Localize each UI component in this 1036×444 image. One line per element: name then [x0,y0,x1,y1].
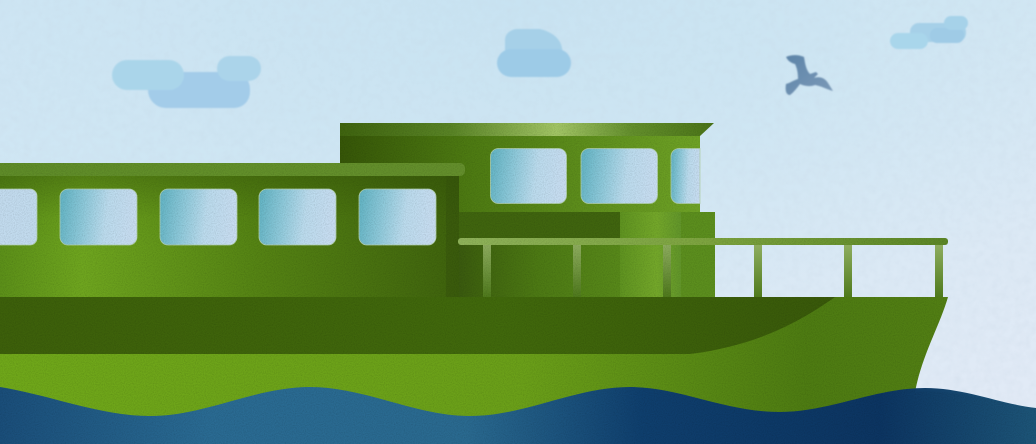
lower cabin aft edge [446,176,459,298]
hull dark band [0,297,835,354]
lower cabin shading [0,176,459,246]
icon: bird [786,55,833,95]
deck block: light section [620,212,681,298]
railing top bar [458,238,948,245]
lower cabin wall [0,170,459,298]
cloud: right [890,16,968,49]
cloud: left [112,56,261,108]
water [0,387,1036,444]
upper cabin windows [490,148,700,204]
upper cabin roof [340,123,714,136]
deck block: fore section [681,212,715,298]
deck block: lower aft [458,212,620,298]
hull [0,297,948,420]
deck block: upper shadow band [458,212,620,238]
railing posts [483,244,943,297]
cloud: centre [497,29,571,77]
texture: grain over boat and water [0,123,1036,444]
lower cabin windows [0,189,436,245]
upper cabin wall [340,135,700,213]
lower cabin roof [0,163,465,176]
boat [0,123,948,420]
